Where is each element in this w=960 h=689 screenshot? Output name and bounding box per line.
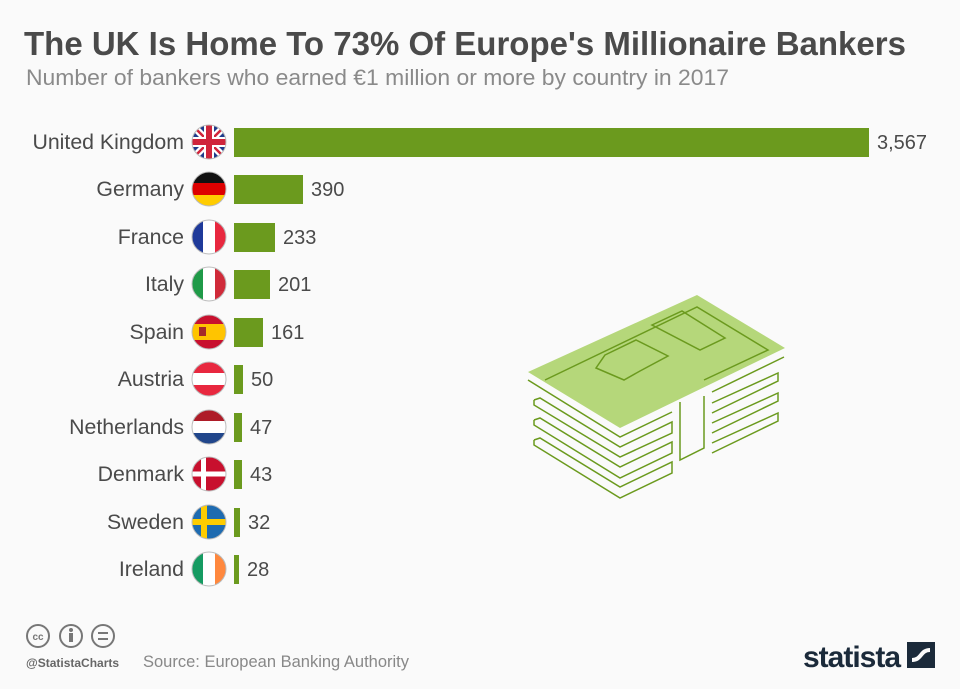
- row: Italy: 201: [278, 274, 311, 296]
- row: United Kingdom: [32, 125, 927, 159]
- row: Denmark: Denmark: [98, 462, 184, 486]
- row: Denmark: [98, 457, 272, 491]
- row: Ireland: 28: [247, 559, 269, 581]
- row: Sweden: [107, 505, 270, 539]
- bar chart: [32, 125, 927, 586]
- row: France: France: [118, 225, 184, 249]
- subtitle: Number of bankers who earned €1 million or more by country in 2017: [26, 65, 729, 90]
- row: France: [120, 222, 316, 252]
- illustration: money stack: [528, 295, 785, 498]
- row: Netherlands: Netherlands: [69, 415, 184, 439]
- row: Ireland: Ireland: [119, 557, 184, 581]
- footer: license icons: cc: [32, 632, 44, 643]
- row: Italy: Italy: [145, 272, 184, 296]
- row: Spain: Spain: [130, 320, 184, 344]
- row: France: 233: [283, 227, 316, 249]
- logo: statista: statista: [803, 641, 901, 674]
- row: Germany: [96, 172, 344, 207]
- row: Netherlands: [69, 410, 272, 445]
- row: Ireland: [120, 554, 268, 584]
- row: Spain: [130, 315, 304, 349]
- row: Denmark: 43: [250, 464, 272, 486]
- row: Austria: [118, 362, 273, 396]
- row: Italy: [146, 268, 310, 300]
- flag outlines: [192, 125, 226, 586]
- footer: handle: @StatistaCharts: [26, 656, 119, 670]
- row: Austria: Austria: [118, 367, 184, 391]
- row: Austria: 50: [251, 369, 273, 391]
- title: The UK Is Home To 73% Of Europe's Millionaire Bankers: [24, 25, 906, 62]
- row: Sweden: Sweden: [107, 510, 184, 534]
- footer: license icons: [27, 625, 114, 647]
- row: Sweden: 32: [248, 512, 270, 534]
- row: Netherlands: 47: [250, 417, 272, 439]
- row: Germany: Germany: [96, 177, 184, 201]
- row: Germany: 390: [311, 179, 344, 201]
- row: Spain: 161: [271, 322, 304, 344]
- footer: source: Source: European Banking Authority: [143, 653, 410, 671]
- row: United Kingdom: 3,567: [877, 132, 927, 154]
- row: United Kingdom: United Kingdom: [32, 130, 184, 154]
